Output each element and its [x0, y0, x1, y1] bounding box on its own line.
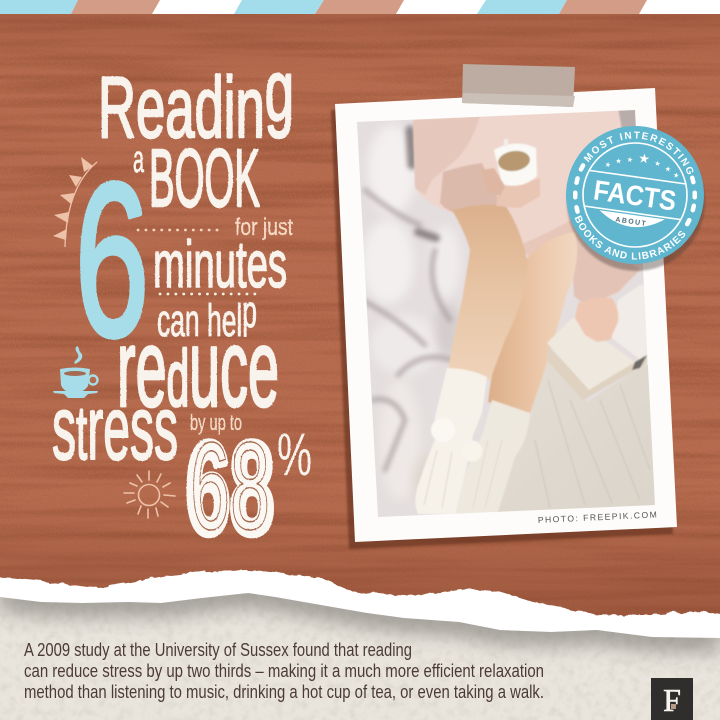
word: Reading: g	[265, 43, 294, 139]
words: can help: p	[242, 286, 257, 337]
headline lettering	[52, 43, 312, 561]
badge shadow	[567, 133, 705, 271]
sheet creases	[535, 380, 650, 508]
band lines	[584, 170, 686, 220]
facts badge	[566, 126, 706, 272]
publisher logo	[651, 678, 693, 720]
stars: ★	[664, 165, 672, 174]
word: stress: stress	[52, 379, 178, 479]
stars: ★	[615, 157, 622, 166]
photograph of woman reading in bed	[350, 105, 660, 520]
dotted divider: upper	[138, 229, 222, 231]
duvet folds	[362, 125, 462, 506]
body paragraph: can reduce stress by up two thirds – making it a much more efficient relaxation	[24, 661, 544, 681]
words: for just: for just	[235, 214, 293, 241]
stars	[604, 147, 682, 180]
bed sheet	[498, 362, 655, 512]
body paragraph	[24, 640, 544, 702]
icon: sun doodle	[124, 471, 175, 518]
about tab: ABOUT	[615, 217, 647, 228]
number 68: 68	[190, 418, 270, 556]
open book	[547, 285, 648, 400]
stars: ★	[654, 159, 661, 168]
dotted divider: lower	[160, 293, 258, 295]
stars: ★	[672, 171, 680, 180]
arc text: most interesting: MOST INTERESTING	[584, 132, 694, 174]
photo print	[331, 64, 677, 549]
icon: sunburst arc around 6	[53, 157, 97, 247]
words: can help: can hel	[157, 295, 302, 346]
word: a: a	[133, 139, 144, 181]
white print frame	[335, 88, 677, 542]
word: FACTS: FACTS	[592, 174, 678, 217]
stars: ★	[637, 151, 651, 168]
recycled paper footer	[0, 585, 720, 720]
wool socks with pompoms	[415, 368, 530, 514]
headline lettering: BOOK	[149, 133, 260, 224]
torn paper edge	[0, 570, 720, 720]
body paragraph: A 2009 study at the University of Sussex found that reading	[24, 640, 412, 660]
number 68	[186, 415, 274, 561]
publisher logo: F	[663, 682, 681, 718]
bare legs	[448, 205, 577, 414]
numeral 6: 6	[75, 139, 149, 382]
word: Reading: Readin	[98, 60, 371, 156]
hand on book	[575, 298, 618, 342]
percent sign: %	[277, 421, 312, 488]
word: minutes: minutes	[153, 227, 287, 301]
coffee cup held in hands	[481, 139, 540, 208]
words: by up to: by up to	[190, 410, 242, 435]
badge disc	[566, 126, 704, 264]
word: reduce: reduce	[117, 307, 279, 430]
side dashes	[570, 159, 700, 231]
photo credit: PHOTO: FREEPIK.COM	[538, 509, 657, 525]
body paragraph: method than listening to music, drinking a hot cup of tea, or even taking a walk.	[24, 682, 544, 702]
washi tape	[462, 64, 575, 107]
stars: ★	[626, 156, 633, 164]
airmail striped top border	[0, 0, 720, 14]
sweater	[413, 108, 645, 306]
about tab	[598, 210, 665, 231]
print shadow	[331, 94, 673, 549]
arc text: books and libraries: BOOKS AND LIBRARIES	[574, 215, 686, 260]
stars: ★	[604, 161, 612, 169]
number 68: 68	[186, 415, 274, 561]
icon: coffee cup	[53, 346, 98, 398]
